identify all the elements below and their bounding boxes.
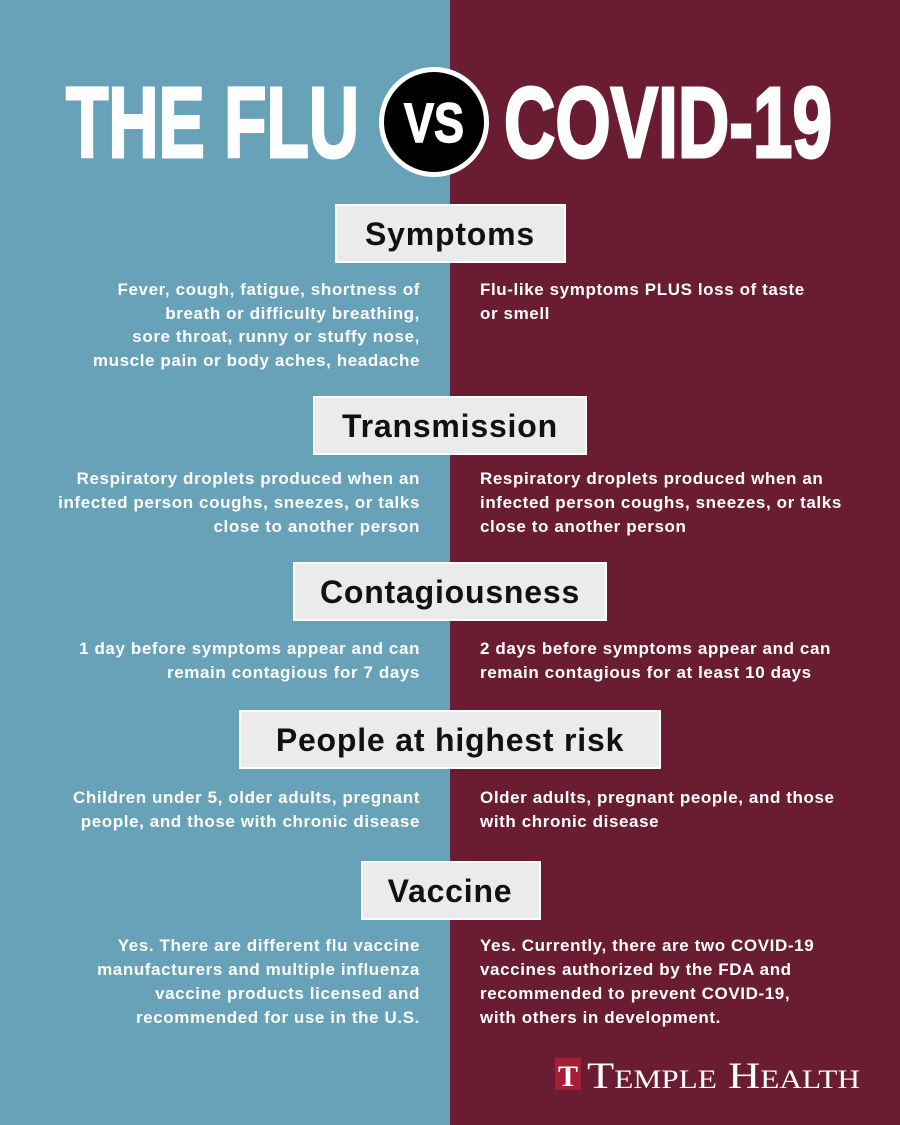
heading: symptoms bbox=[336, 205, 565, 262]
text: covid contagiousness bbox=[480, 639, 831, 682]
text: flu vaccine bbox=[97, 936, 420, 1027]
text: covid risk bbox=[479, 788, 835, 831]
text: flu vaccine: manufacturers and multiple influenza bbox=[97, 960, 420, 979]
text: flu transmission: Respiratory droplets produced when an bbox=[77, 469, 420, 488]
icon: vs circle: VS bbox=[404, 91, 464, 154]
heading: transmission: Transmission bbox=[342, 408, 558, 444]
text: flu vaccine: Yes. There are different flu vaccine bbox=[118, 936, 420, 955]
text: covid transmission: infected person coughs, sneezes, or talks bbox=[480, 493, 842, 512]
heading: vaccine: Vaccine bbox=[388, 873, 512, 909]
text: covid symptoms: or smell bbox=[480, 304, 550, 323]
text: covid risk: with chronic disease bbox=[479, 812, 659, 831]
logo: temple health bbox=[555, 1056, 860, 1097]
text: flu transmission bbox=[58, 469, 420, 536]
icon: vs circle bbox=[379, 67, 489, 177]
text: covid contagiousness: remain contagious for at least 10 days bbox=[480, 663, 812, 682]
heading: contagiousness bbox=[294, 563, 606, 620]
heading: contagiousness: Contagiousness bbox=[320, 574, 580, 610]
text: covid vaccine: vaccines authorized by the FDA and bbox=[480, 960, 792, 979]
logo text: Temple Health bbox=[587, 1056, 860, 1097]
text: flu risk: people, and those with chronic disease bbox=[81, 812, 420, 831]
text: flu symptoms bbox=[93, 280, 420, 370]
heading: transmission bbox=[314, 397, 586, 454]
text: flu contagiousness bbox=[79, 639, 420, 682]
text: flu contagiousness: 1 day before symptoms appear and can bbox=[79, 639, 420, 658]
title: the flu: THE FLU bbox=[66, 67, 359, 179]
text: flu symptoms: sore throat, runny or stuffy nose, bbox=[132, 327, 420, 346]
text: flu symptoms: muscle pain or body aches, headache bbox=[93, 351, 420, 370]
heading: symptoms: Symptoms bbox=[365, 216, 535, 252]
text: covid vaccine: Yes. Currently, there are two COVID-19 bbox=[480, 936, 814, 955]
text: flu vaccine: vaccine products licensed and bbox=[155, 984, 420, 1003]
text: flu vaccine: recommended for use in the U.S. bbox=[136, 1008, 420, 1027]
text: covid vaccine: recommended to prevent COVID-19, bbox=[480, 984, 790, 1003]
text: covid vaccine: with others in development. bbox=[479, 1008, 721, 1027]
text: covid symptoms: Flu-like symptoms PLUS loss of taste bbox=[480, 280, 805, 299]
text: flu transmission: close to another person bbox=[213, 517, 420, 536]
text: covid vaccine bbox=[479, 936, 814, 1027]
text: flu contagiousness: remain contagious for 7 days bbox=[167, 663, 420, 682]
text: covid risk: Older adults, pregnant people, and those bbox=[480, 788, 835, 807]
text: flu symptoms: Fever, cough, fatigue, shortness of bbox=[118, 280, 420, 299]
text: covid symptoms bbox=[480, 280, 805, 323]
text: flu symptoms: breath or difficulty breathing, bbox=[165, 304, 420, 323]
text: flu risk bbox=[73, 788, 420, 831]
heading: people at highest risk bbox=[240, 711, 660, 768]
text: covid transmission bbox=[480, 469, 842, 536]
background: flu side bbox=[0, 0, 450, 1125]
heading: people at highest risk: People at highest risk bbox=[276, 722, 624, 758]
text: flu risk: Children under 5, older adults, pregnant bbox=[73, 788, 420, 807]
text: covid contagiousness: 2 days before symptoms appear and can bbox=[480, 639, 831, 658]
title bbox=[66, 67, 832, 179]
background: covid side bbox=[450, 0, 900, 1125]
text: covid transmission: close to another person bbox=[480, 517, 687, 536]
text: flu transmission: infected person coughs, sneezes, or talks bbox=[58, 493, 420, 512]
icon: temple T: T bbox=[558, 1060, 578, 1093]
text: covid transmission: Respiratory droplets produced when an bbox=[480, 469, 823, 488]
heading: vaccine bbox=[362, 862, 540, 919]
